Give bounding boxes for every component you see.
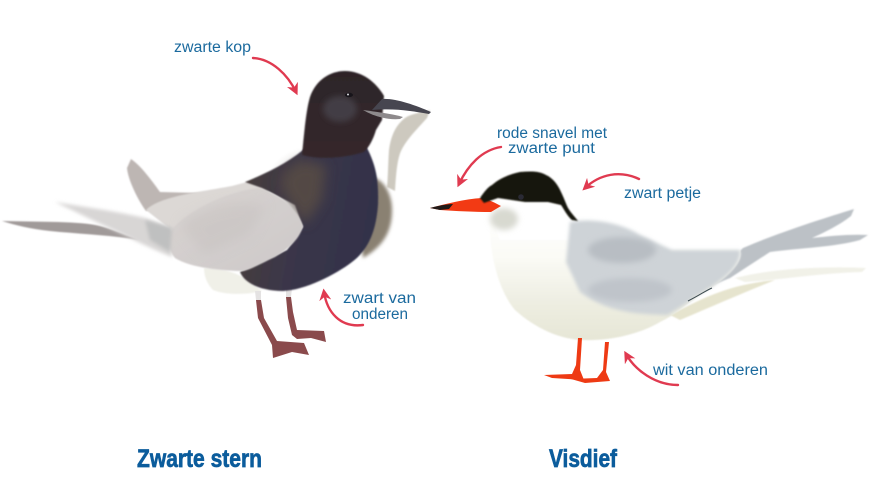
rear belly bbox=[355, 178, 392, 258]
face patch bbox=[323, 96, 357, 122]
brown flank highlight bbox=[281, 160, 326, 225]
label: zwart van onderen: onderen bbox=[352, 306, 408, 323]
grey primaries bbox=[145, 220, 172, 252]
bird: visdief bbox=[430, 171, 868, 383]
arrow: wit van onderen bbox=[626, 354, 678, 385]
legs bbox=[256, 297, 326, 358]
wing bbox=[566, 221, 740, 315]
tail bbox=[700, 209, 868, 290]
leg tops bbox=[255, 288, 292, 300]
label: zwart van onderen: zwart van bbox=[343, 290, 416, 307]
long tail streamer bbox=[2, 221, 140, 240]
beak bbox=[430, 198, 501, 212]
label: zwart petje: zwart petje bbox=[624, 185, 701, 202]
arrow: rode snavel bbox=[459, 147, 501, 184]
label: zwarte kop: zwarte kop bbox=[174, 39, 251, 56]
white rump bbox=[204, 268, 262, 294]
wing tip line bbox=[688, 288, 712, 301]
label: rode snavel met zwarte punt: zwarte punt bbox=[508, 140, 596, 157]
throat shade bbox=[490, 208, 518, 230]
heading: visdief: Visdief bbox=[549, 445, 618, 473]
tail feathers bbox=[55, 202, 172, 257]
arrow: zwarte kop bbox=[253, 58, 296, 92]
tail streamer lower bbox=[735, 267, 866, 282]
body bbox=[490, 210, 741, 340]
wing bbox=[169, 188, 303, 271]
leg near bbox=[256, 300, 309, 358]
upright wing tip bbox=[127, 159, 200, 211]
beak tip bbox=[430, 204, 453, 210]
dark body bbox=[240, 130, 378, 291]
legs bbox=[544, 338, 610, 383]
head white bbox=[484, 200, 578, 240]
head bbox=[302, 71, 384, 158]
annotation arrows bbox=[253, 58, 678, 385]
wing lower shade bbox=[588, 278, 672, 302]
upper beak bbox=[372, 99, 431, 114]
fish in beak bbox=[387, 110, 430, 191]
lower beak bbox=[363, 110, 403, 119]
back bbox=[146, 178, 270, 240]
black cap bbox=[480, 171, 578, 221]
arrow: zwart petje bbox=[585, 174, 639, 188]
leg left bbox=[544, 338, 584, 380]
eye bbox=[345, 93, 353, 97]
under tail bbox=[670, 280, 775, 320]
arrow: zwart van onderen bbox=[324, 292, 363, 325]
leg right bbox=[571, 342, 610, 383]
leg far bbox=[286, 297, 326, 342]
wing shade bbox=[180, 203, 265, 255]
eye bbox=[518, 194, 524, 200]
label: wit van onderen: wit van onderen bbox=[652, 362, 768, 379]
wing dark patch bbox=[588, 237, 656, 263]
heading: zwarte stern: Zwarte stern bbox=[137, 445, 262, 473]
label: rode snavel met zwarte punt: rode snavel met bbox=[497, 125, 608, 142]
bird: zwarte stern bbox=[2, 71, 431, 358]
